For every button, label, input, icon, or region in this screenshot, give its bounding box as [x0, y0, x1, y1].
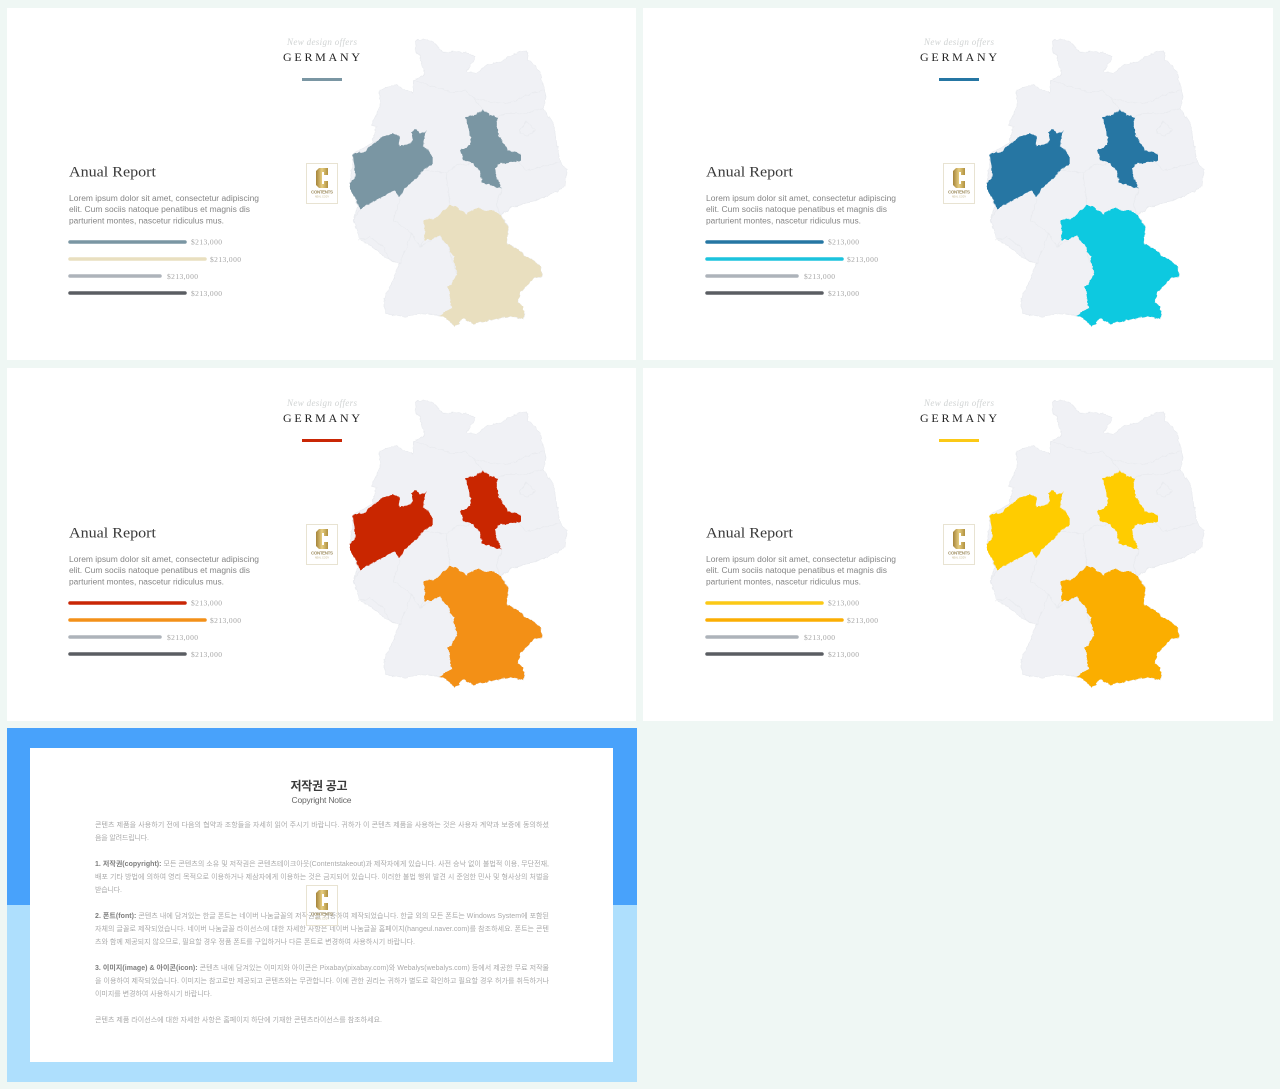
- bar chart: [70, 238, 241, 298]
- heading: copyright notice: 저작권 공고: [290, 778, 348, 793]
- logo: NEAL CODY: [315, 556, 330, 560]
- bar chart: $213,000: [191, 289, 222, 298]
- bar chart: $213,000: [804, 272, 835, 281]
- bar chart: $213,000: [191, 598, 222, 608]
- heading: Germany: [920, 398, 997, 442]
- logo: CONTENTS: [311, 550, 333, 556]
- text block: annual report: Lorem ipsum dolor sit amet, consectetur adipiscing: [69, 194, 259, 203]
- bar chart: $213,000: [828, 238, 859, 246]
- heading: Germany: GERMANY: [283, 411, 360, 425]
- logo: NEAL CODY: [315, 918, 330, 920]
- text block: annual report: [69, 526, 259, 586]
- bar chart: $213,000: [210, 255, 241, 264]
- bar chart: $213,000: [167, 272, 198, 281]
- bar chart: $213,000: [191, 650, 222, 659]
- heading: Germany: [283, 37, 360, 81]
- bar chart: $213,000: [828, 289, 859, 298]
- text block: notice body: 배포 기타 방법에 의하여 영리 목적으로 이용하거나 제삼자에게 이용하는 것은 금지되어 있습니다. 이러한 불법 행위 발견 시 준엄한 민사 및 형사상의 처벌을: [95, 872, 550, 881]
- panel: slate and beige variant: [7, 8, 636, 360]
- text block: notice body: 이미지를 변경하여 사용하시기 바랍니다.: [95, 989, 212, 998]
- logo: NEAL CODY: [315, 196, 330, 198]
- text block: notice body: 자체의 글꼴로 제작되었습니다. 네이버 나눔글꼴 라이선스에 대한 자세한 사항은 네이버 나눔글꼴 홈페이지(hangeul.naver.com)를 참조하세요. 폰트는 콘텐: [95, 924, 549, 933]
- text block: annual report: Anual Report: [69, 526, 157, 542]
- bar chart: [707, 598, 878, 659]
- bar chart: $213,000: [167, 633, 198, 642]
- text block: annual report: parturient montes, nascetur ridiculus mus.: [69, 578, 224, 586]
- heading: Germany: GERMANY: [920, 411, 997, 425]
- text block: notice body: 콘텐츠 제품을 사용하기 전에 다음의 협약과 조항들을 자세히 읽어 주시기 바랍니다. 귀하가 이 콘텐츠 제품을 사용하는 것은 사용자 계약과 보증에 동의하셨: [95, 820, 550, 829]
- text block: annual report: [69, 164, 259, 226]
- bar chart: $213,000: [191, 238, 222, 246]
- map of Germany: [349, 400, 567, 688]
- text block: notice body: [95, 820, 550, 1024]
- panel: red and orange variant: [7, 368, 636, 721]
- text block: annual report: Anual Report: [706, 164, 794, 180]
- bar chart: $213,000: [847, 616, 878, 625]
- text block: notice body: 받습니다.: [95, 885, 122, 894]
- text block: notice body: 을 이용하여 제작되었습니다. 이미지는 참고로만 제공되고 콘텐츠와는 무관합니다. 이에 관한 권리는 귀하가 별도로 확인하고 필요할 경우 허가를 취득하거나: [95, 976, 550, 985]
- bar chart: [70, 598, 241, 659]
- logo: [944, 164, 974, 204]
- text block: annual report: [706, 526, 896, 586]
- bar chart: $213,000: [828, 650, 859, 659]
- text block: annual report: elit. Cum sociis natoque penatibus et magnis dis: [69, 205, 250, 214]
- heading: Germany: GERMANY: [920, 50, 997, 64]
- logo: [944, 524, 974, 564]
- text block: annual report: Lorem ipsum dolor sit amet, consectetur adipiscing: [706, 555, 896, 564]
- logo: CONTENTS: [311, 912, 333, 916]
- heading: Germany: New design offers: [286, 398, 357, 408]
- logo: CONTENTS: [311, 190, 333, 194]
- logo: [306, 524, 338, 564]
- heading: Germany: GERMANY: [283, 50, 360, 64]
- map of Germany: [986, 400, 1204, 688]
- logo: NEAL CODY: [952, 196, 967, 198]
- text block: notice body: 2. 폰트(font): 콘텐츠 내에 담겨있는 한글 폰트는 네이버 나눔글꼴의 저작권을 기증하여 제작되었습니다. 한글 외의 모든 폰트는 Windows System에 포함된: [95, 911, 549, 920]
- text block: annual report: Lorem ipsum dolor sit amet, consectetur adipiscing: [69, 555, 259, 564]
- map of Germany: [349, 39, 567, 327]
- text block: annual report: elit. Cum sociis natoque penatibus et magnis dis: [69, 566, 250, 575]
- heading: Germany: New design offers: [923, 37, 994, 47]
- text block: annual report: [706, 164, 896, 226]
- text block: annual report: parturient montes, nascetur ridiculus mus.: [706, 216, 861, 226]
- text block: notice body: 음을 알려드립니다.: [95, 833, 149, 842]
- heading: Germany: [283, 398, 360, 442]
- heading: copyright notice: Copyright Notice: [292, 795, 352, 805]
- heading: Germany: New design offers: [923, 398, 994, 408]
- text block: notice body: 츠와 함께 제공되지 않으므로, 필요할 경우 정품 폰트를 구입하거나 다른 폰트로 변경하여 사용하시기 바랍니다.: [95, 937, 415, 946]
- text block: notice body: 3. 이미지(image) & 아이콘(icon): 콘텐츠 내에 담겨있는 이미지와 아이콘은 Pixabay(pixabay.com)와 Webalys(webalys.com) 등에서 제공한 무료 저작물: [95, 963, 550, 972]
- text block: annual report: Lorem ipsum dolor sit amet, consectetur adipiscing: [706, 194, 896, 203]
- logo: CONTENTS: [948, 550, 970, 556]
- bar chart: $213,000: [210, 616, 241, 625]
- text block: annual report: parturient montes, nascetur ridiculus mus.: [69, 216, 224, 226]
- bar chart: $213,000: [804, 633, 835, 642]
- bar chart: $213,000: [828, 598, 859, 608]
- bar chart: [707, 238, 878, 298]
- logo: CONTENTS: [948, 190, 970, 194]
- heading: copyright notice: [290, 778, 352, 805]
- logo: NEAL CODY: [952, 556, 967, 560]
- text block: notice body: 콘텐츠 제품 라이선스에 대한 자세한 사항은 홈페이지 하단에 기재한 콘텐츠라이선스를 참조하세요.: [95, 1015, 382, 1024]
- panel: yellow variant: [643, 368, 1273, 721]
- logo: [306, 886, 338, 926]
- heading: Germany: New design offers: [286, 37, 357, 47]
- panel: blue variant: [643, 8, 1273, 360]
- panel: copyright notice: [7, 728, 637, 1082]
- map of Germany: [986, 39, 1204, 327]
- logo: [306, 164, 338, 204]
- text block: annual report: parturient montes, nascetur ridiculus mus.: [706, 578, 861, 586]
- text block: annual report: Anual Report: [69, 164, 157, 180]
- text block: annual report: elit. Cum sociis natoque penatibus et magnis dis: [706, 566, 887, 575]
- text block: annual report: Anual Report: [706, 526, 794, 542]
- text block: notice body: 1. 저작권(copyright): 모든 콘텐츠의 소유 및 저작권은 콘텐츠테이크아웃(Contentstakeout)과 제작자에게 있습니다. 사전 승낙 없이 불법적 이용, 무단전재,: [95, 859, 549, 868]
- bar chart: $213,000: [847, 255, 878, 264]
- heading: Germany: [920, 37, 997, 81]
- text block: annual report: elit. Cum sociis natoque penatibus et magnis dis: [706, 205, 887, 214]
